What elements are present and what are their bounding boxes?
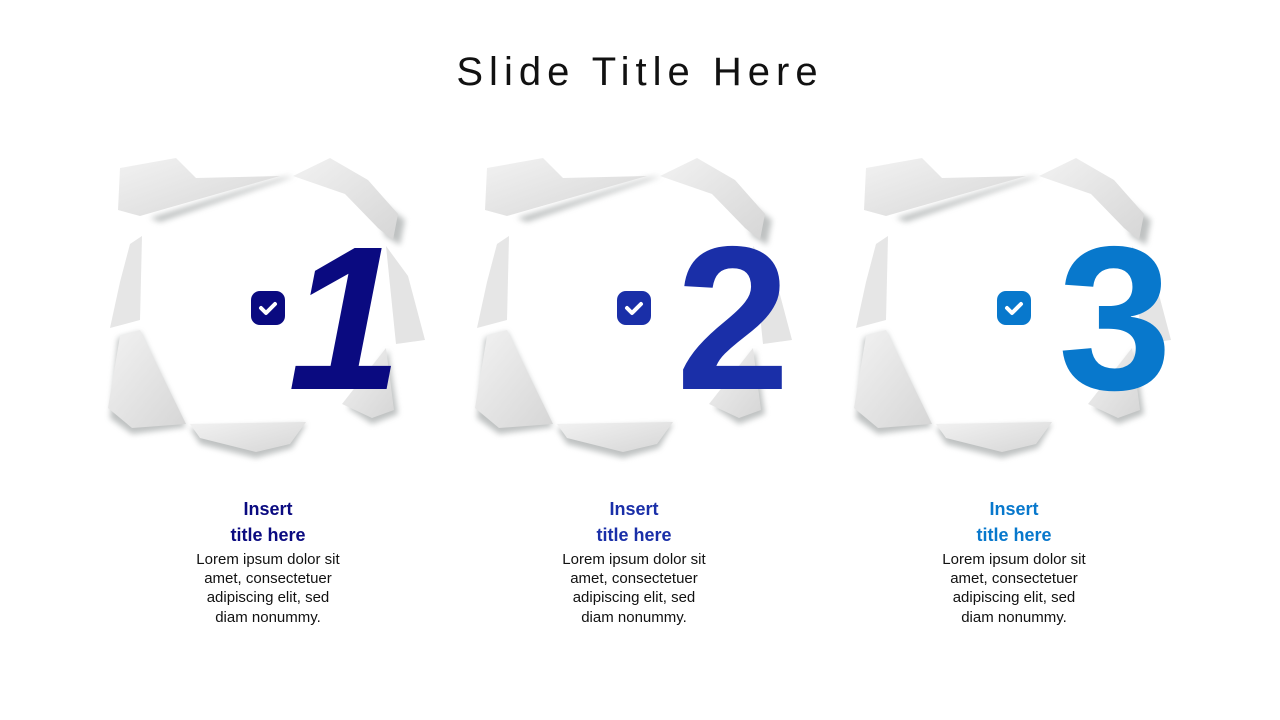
text block 2: diam nonummy. bbox=[581, 609, 687, 626]
text block 1: Lorem ipsum dolor sit bbox=[196, 551, 341, 568]
text block 3: amet, consectetuer bbox=[950, 570, 1078, 587]
text block 1: diam nonummy. bbox=[215, 609, 321, 626]
panel: step 2 bbox=[475, 158, 792, 626]
icon: check 3 bbox=[997, 291, 1031, 325]
text block 2: Lorem ipsum dolor sit bbox=[562, 551, 707, 568]
text block 1: Insert bbox=[243, 499, 293, 519]
title: Slide Title Here bbox=[456, 50, 824, 94]
text block 1: title here bbox=[230, 525, 306, 545]
number 3: 3 bbox=[1058, 204, 1172, 433]
panel: step 1 bbox=[108, 158, 425, 626]
text block 1: amet, consectetuer bbox=[204, 570, 332, 587]
text block 3 bbox=[942, 499, 1087, 626]
icon: check 1 bbox=[251, 291, 285, 325]
text block 3: diam nonummy. bbox=[961, 609, 1067, 626]
text block 2: title here bbox=[596, 525, 672, 545]
text block 2: Insert bbox=[609, 499, 659, 519]
text block 3: title here bbox=[976, 525, 1052, 545]
torn paper 3 bbox=[854, 158, 1171, 458]
text block 2: adipiscing elit, sed bbox=[573, 589, 695, 606]
panel: step 3 bbox=[854, 158, 1172, 626]
text block 3: adipiscing elit, sed bbox=[953, 589, 1075, 606]
torn paper 2 bbox=[475, 158, 792, 458]
text block 2 bbox=[562, 499, 707, 626]
icon: check 2 bbox=[617, 291, 651, 325]
text block 3: Lorem ipsum dolor sit bbox=[942, 551, 1087, 568]
text block 1 bbox=[196, 499, 341, 626]
torn paper 1 bbox=[108, 158, 425, 458]
text block 2: amet, consectetuer bbox=[570, 570, 698, 587]
text block 1: adipiscing elit, sed bbox=[207, 589, 329, 606]
text block 3: Insert bbox=[989, 499, 1039, 519]
number 2: 2 bbox=[676, 204, 790, 433]
number 1: 1 bbox=[288, 204, 402, 433]
